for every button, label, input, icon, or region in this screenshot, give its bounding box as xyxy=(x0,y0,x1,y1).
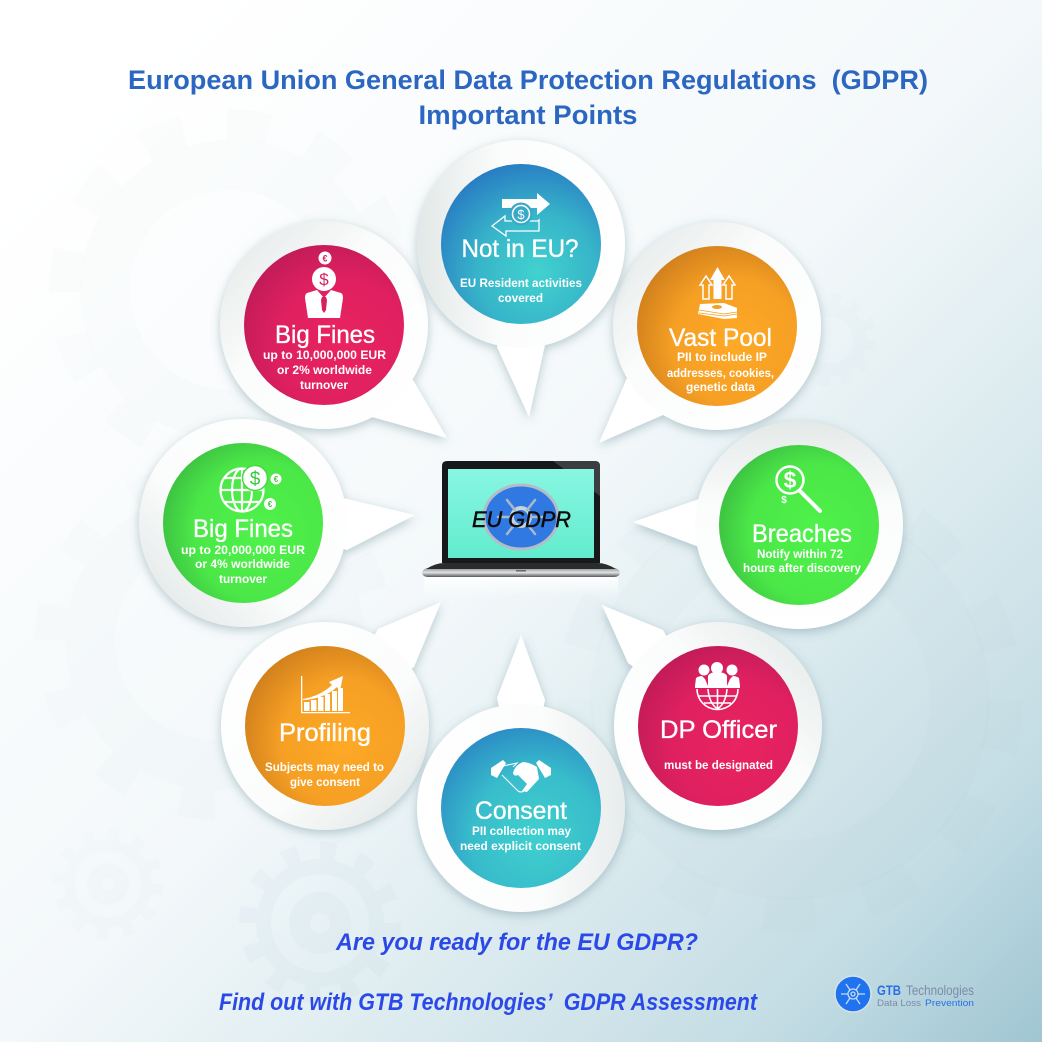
text block: addresses, cookies, xyxy=(667,368,774,380)
icon: globe with coins: € xyxy=(274,475,279,484)
text block xyxy=(263,350,387,392)
call to action xyxy=(219,929,758,1016)
icon: businessman with coins: $ xyxy=(319,270,329,289)
text block xyxy=(460,826,581,853)
text block xyxy=(181,545,306,586)
text block: Notify within 72 xyxy=(757,549,843,561)
text block xyxy=(667,352,774,394)
panel: big fines 10M xyxy=(220,221,447,438)
icon: globe with coins: € xyxy=(268,500,273,509)
title: Important Points xyxy=(418,100,638,130)
text block: or 2% worldwide xyxy=(277,365,372,377)
GTB logo: Technologies xyxy=(906,982,974,998)
text block xyxy=(743,549,862,575)
panel: DP officer xyxy=(602,605,822,830)
logo on screen xyxy=(484,485,558,549)
text block: turnover xyxy=(219,574,268,586)
panel: profiling xyxy=(221,602,441,830)
GTB logo: Prevention xyxy=(925,998,974,1009)
heading: Breaches xyxy=(752,520,852,548)
heading: DP Officer xyxy=(660,716,777,744)
text block: need explicit consent xyxy=(460,841,581,853)
GTB logo: Data Loss xyxy=(877,998,921,1009)
heading: Consent xyxy=(475,797,567,825)
text block: EU Resident activities xyxy=(460,278,582,290)
call to action: Find out with GTB Technologies’ GDPR Assessment xyxy=(219,989,758,1016)
heading: Vast Pool xyxy=(669,324,772,352)
title xyxy=(128,65,928,130)
heading: Big Fines xyxy=(193,515,293,543)
text block: must be designated xyxy=(664,760,773,772)
icon: money transfer arrows xyxy=(492,193,550,236)
GTB logo: GTB xyxy=(877,982,901,998)
icon: rising bar chart xyxy=(301,676,350,713)
panel: vast pool xyxy=(599,222,821,443)
text block: covered xyxy=(498,293,543,305)
laptop label: EU GDPR xyxy=(472,507,571,532)
panel: not in EU xyxy=(417,140,625,417)
text block xyxy=(460,278,582,305)
heading: Not in EU? xyxy=(462,235,578,263)
text block: turnover xyxy=(300,380,349,392)
panel: big fines 20M xyxy=(139,419,415,627)
heading: Big Fines xyxy=(275,321,375,349)
icon: globe with coins xyxy=(220,466,282,512)
title: European Union General Data Protection Regulations (GDPR) xyxy=(128,65,928,95)
text block: give consent xyxy=(290,777,360,789)
icon: handshake xyxy=(491,760,551,792)
text block: genetic data xyxy=(686,382,756,394)
icon: globe with coins: $ xyxy=(250,469,261,490)
heading: Profiling xyxy=(279,719,371,747)
call to action: Are you ready for the EU GDPR? xyxy=(335,929,698,956)
icon: money transfer arrows: $ xyxy=(517,207,525,222)
icon: magnifier with dollar: $ xyxy=(781,495,787,506)
text block: PII to include IP xyxy=(677,352,767,364)
text block: Subjects may need to xyxy=(265,762,384,774)
icon: arrows over money xyxy=(698,267,737,319)
laptop xyxy=(422,461,620,597)
text block: PII collection may xyxy=(472,826,572,838)
text block xyxy=(265,762,384,789)
panel: breaches xyxy=(633,421,903,629)
icon: magnifier with dollar xyxy=(776,466,820,511)
GTB logo xyxy=(835,976,974,1012)
icon: magnifier with dollar: $ xyxy=(784,467,797,493)
panel: consent xyxy=(417,635,625,912)
icon: businessman with coins xyxy=(305,252,343,318)
icon: businessman with coins: € xyxy=(322,254,328,264)
text block: or 4% worldwide xyxy=(195,559,290,571)
text block: up to 10,000,000 EUR xyxy=(263,350,387,362)
text block: hours after discovery xyxy=(743,563,862,575)
text block: up to 20,000,000 EUR xyxy=(181,545,306,557)
icon: people on globe xyxy=(695,662,740,710)
